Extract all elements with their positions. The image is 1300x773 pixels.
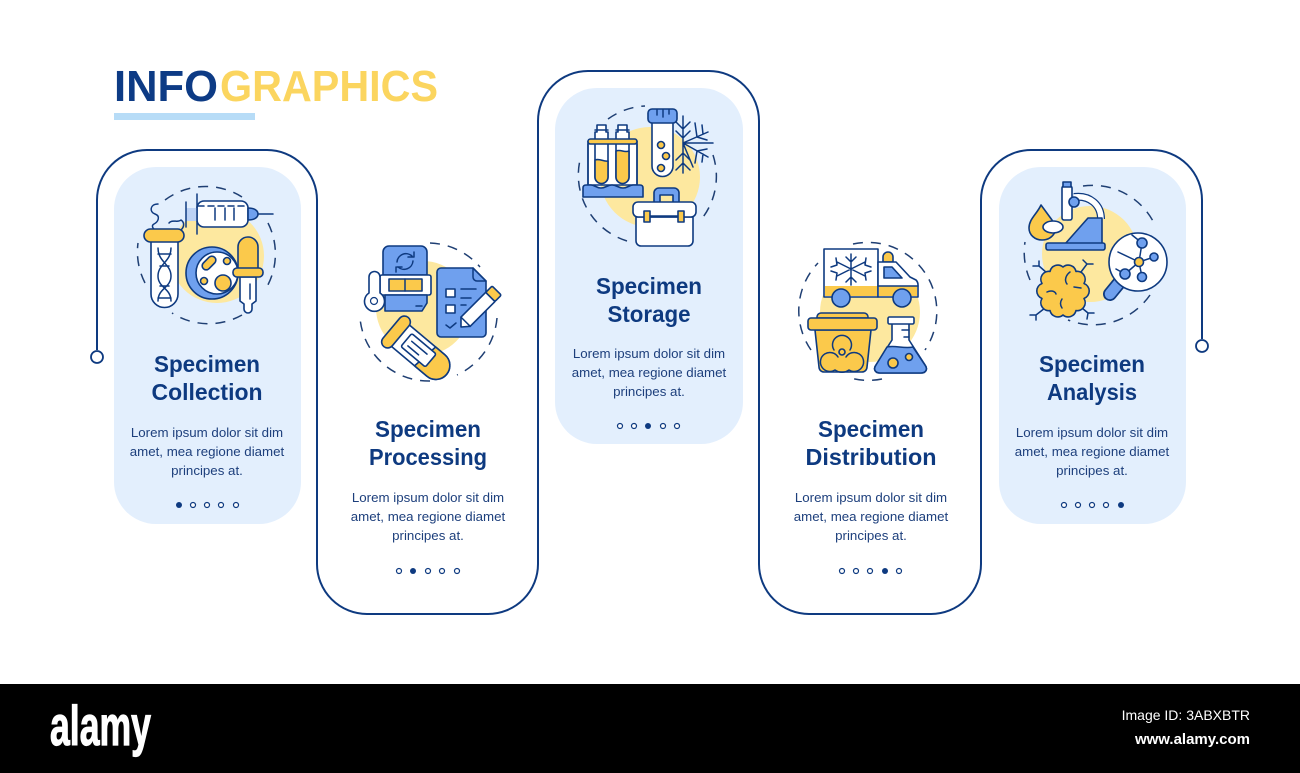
text: specimen processing: Specimen	[375, 416, 481, 442]
magnifier with molecule	[1109, 233, 1167, 294]
text: specimen analysis: Specimen	[1039, 351, 1145, 377]
text: specimen processing: Processing	[369, 444, 487, 470]
title: INFO	[114, 62, 218, 111]
biohazard bin	[808, 313, 877, 372]
panel: specimen storage background	[555, 88, 743, 444]
text: specimen distribution: Specimen	[818, 416, 924, 442]
footer logo: alamy	[50, 694, 151, 757]
icon: specimen distribution	[799, 242, 937, 380]
text: specimen storage: Lorem ipsum dolor sit dim	[573, 346, 725, 361]
icon: specimen analysis	[1024, 182, 1167, 325]
toolbox	[633, 188, 696, 246]
text: specimen analysis: Lorem ipsum dolor sit dim	[1016, 425, 1168, 440]
text: specimen collection: Specimen	[154, 351, 260, 377]
connecting outline	[91, 71, 1208, 614]
tube rack	[583, 125, 643, 197]
text: specimen distribution: principes at.	[835, 528, 907, 543]
text: specimen processing: principes at.	[392, 528, 464, 543]
pagination dots: step 3	[618, 423, 680, 429]
text: specimen collection: Lorem ipsum dolor sit dim	[131, 425, 283, 440]
refrigerated truck	[824, 249, 918, 307]
text: specimen analysis: amet, mea regione diamet	[1015, 444, 1170, 459]
text: specimen storage	[572, 273, 727, 399]
blue cap tube	[648, 109, 677, 176]
pagination dots: step 2	[396, 568, 460, 574]
test tube with DNA	[144, 229, 184, 308]
frost crystal	[676, 116, 713, 173]
title: GRAPHICS	[220, 62, 438, 111]
pagination dots: step 4	[840, 568, 902, 574]
text: specimen distribution: Lorem ipsum dolor sit dim	[795, 490, 947, 505]
panel: specimen analysis background	[999, 167, 1186, 524]
microscope	[1046, 182, 1105, 250]
processing machine	[380, 246, 431, 311]
text: specimen storage: principes at.	[613, 384, 685, 399]
text: specimen collection: principes at.	[171, 463, 243, 478]
icon: specimen processing	[360, 243, 501, 389]
pagination dots: step 5	[1062, 502, 1124, 508]
footer url: www.alamy.com	[1134, 731, 1250, 748]
text: specimen analysis: principes at.	[1056, 463, 1128, 478]
blood drop	[1029, 205, 1063, 240]
text: specimen analysis: Analysis	[1047, 379, 1137, 405]
text: specimen collection	[130, 351, 285, 478]
text: specimen processing	[351, 416, 506, 543]
syringe	[186, 194, 273, 234]
footer image id: Image ID: 3ABXBTR	[1122, 707, 1250, 723]
panel: specimen collection background	[114, 167, 301, 524]
text: specimen processing: Lorem ipsum dolor sit dim	[352, 490, 504, 505]
text: specimen distribution	[794, 416, 949, 543]
pencil	[456, 286, 501, 331]
thermometer	[365, 272, 384, 311]
footer bar	[0, 684, 1300, 773]
tissue cluster	[1030, 260, 1094, 320]
text: specimen distribution: Distribution	[806, 444, 936, 470]
text: specimen analysis	[1015, 351, 1170, 478]
text: specimen storage: amet, mea regione diamet	[572, 365, 727, 380]
text: specimen distribution: amet, mea regione diamet	[794, 509, 949, 524]
clipboard document	[437, 268, 486, 337]
icon: specimen collection	[137, 186, 275, 324]
sample tube	[379, 314, 459, 389]
flask	[875, 317, 926, 373]
dropper	[233, 237, 263, 313]
icon: specimen storage	[578, 106, 716, 246]
text: specimen collection: Collection	[152, 379, 262, 405]
petri dish	[186, 247, 238, 299]
pagination dots: step 1	[176, 502, 238, 508]
title	[114, 62, 438, 120]
text: specimen storage: Specimen	[596, 273, 702, 299]
text: specimen storage: Storage	[608, 301, 690, 327]
text: specimen collection: amet, mea regione diamet	[130, 444, 285, 459]
text: specimen processing: amet, mea regione diamet	[351, 509, 506, 524]
